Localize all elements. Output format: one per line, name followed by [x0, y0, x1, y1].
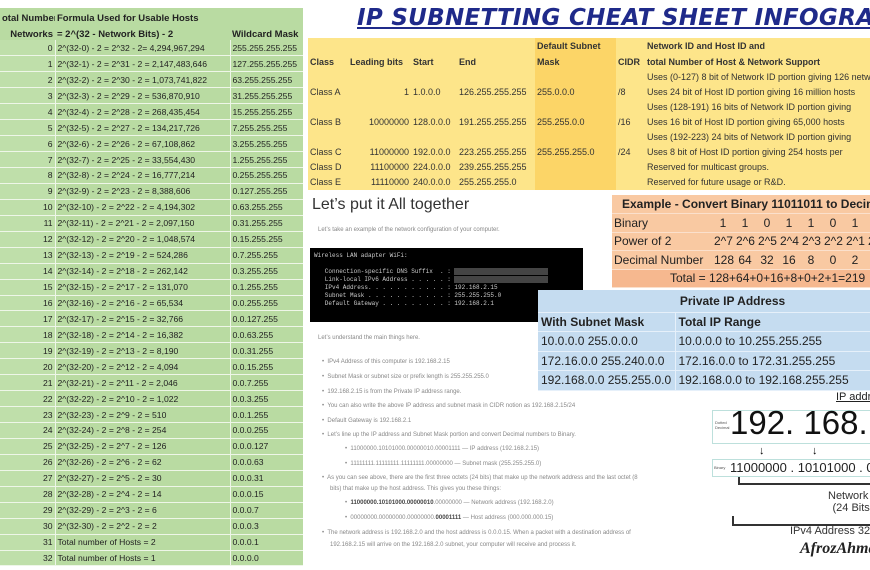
- panel: subnet formula table: 0.0.0.255: [232, 425, 268, 435]
- diagram: IP address structure: [712, 391, 870, 557]
- panel: subnet formula table: 7.255.255.255: [232, 123, 287, 133]
- terminal screenshot: Wireless LAN adapter WiFi: Connection-specific DNS Suffix . : Link-local IPv6 Address . . . . . : IPv4 Address. . . . . . . . . . . : 192.168.2.15 Subnet Mask . . . . . . . . . . . : 255.255.255.0 Default Gateway . . . . . . . . . : 192.168.2.1: [314, 252, 501, 307]
- panel: subnet formula table: 0.0.0.127: [232, 441, 268, 451]
- panel: subnet formula table: 10: [43, 202, 52, 212]
- text: explanation bullets: • 11000000.10101000.00000010.00000000 — Network address (192.168.2.0): [345, 500, 554, 506]
- panel: IP classes table: total Number of Host & Network Support: [647, 57, 820, 67]
- panel: IP classes table: [308, 38, 870, 190]
- panel: subnet formula table: 27: [43, 473, 52, 483]
- panel: subnet formula table: [0, 8, 303, 566]
- panel: subnet formula table: 2^(32-14) - 2 = 2^18 - 2 = 262,142: [58, 266, 188, 276]
- panel: binary conversion example: 128: [714, 253, 734, 267]
- panel: subnet formula table: 0.127.255.255: [232, 186, 287, 196]
- panel: IP classes table: Reserved for future usage or R&D.: [647, 177, 786, 187]
- panel: subnet formula table: 6: [48, 139, 52, 149]
- terminal screenshot: [310, 248, 583, 322]
- panel: IP classes table: Default Subnet: [537, 41, 601, 51]
- panel: subnet formula table: 0.1.255.255: [232, 282, 278, 292]
- text: explanation bullets: • Let’s line up the IP address and Subnet Mask portion and convert Decimal numbers to Binary.: [322, 432, 576, 438]
- panel: IP classes table: 1.0.0.0: [413, 87, 441, 97]
- panel: subnet formula table: 15.255.255.255: [232, 107, 292, 117]
- text: explanation bullets: • Subnet Mask or subnet size or prefix length is 255.255.255.0: [322, 374, 489, 380]
- panel: subnet formula table: 2^(32-6) - 2 = 2^26 - 2 = 67,108,862: [58, 139, 195, 149]
- panel: subnet formula table: 2^(32-16) - 2 = 2^16 - 2 = 65,534: [58, 298, 183, 308]
- heading: put it together: Let’s put it All together: [312, 196, 469, 213]
- panel: IP classes table: Mask: [537, 57, 560, 67]
- panel: subnet formula table: 2^(32-25) - 2 = 2^7 - 2 = 126: [58, 441, 166, 451]
- panel: binary conversion example: 2^7: [714, 234, 733, 248]
- panel: subnet formula table: Total number of Hosts = 1: [58, 553, 156, 563]
- panel: binary conversion example: 1: [808, 216, 814, 230]
- panel: IP classes table: Uses 8 bit of Host ID portion giving 254 hosts per: [647, 147, 843, 157]
- panel: subnet formula table: 2^(32-21) - 2 = 2^11 - 2 = 2,046: [58, 378, 178, 388]
- panel: IP classes table: 11100000: [370, 162, 409, 172]
- panel: subnet formula table: 25: [43, 441, 52, 451]
- panel: subnet formula table: 2^(32-28) - 2 = 2^4 - 2 = 14: [58, 489, 162, 499]
- panel: subnet formula table: 2^(32-18) - 2 = 2^14 - 2 = 16,382: [58, 330, 183, 340]
- panel: binary conversion example: 64: [738, 253, 752, 267]
- panel: binary conversion example: 0: [764, 216, 770, 230]
- panel: subnet formula table: 0.63.255.255: [232, 202, 283, 212]
- panel: subnet formula table: 2^(32-20) - 2 = 2^12 - 2 = 4,094: [58, 362, 178, 372]
- panel: private IP address table: With Subnet Mask: [541, 315, 644, 329]
- panel: subnet formula table: 0.7.255.255: [232, 250, 278, 260]
- panel: binary conversion example: 1: [786, 216, 792, 230]
- panel: subnet formula table: 2^(32-23) - 2 = 2^9 - 2 = 510: [58, 410, 166, 420]
- panel: subnet formula table: 21: [43, 378, 52, 388]
- panel: subnet formula table: 0: [48, 43, 52, 53]
- panel: subnet formula table: 29: [43, 505, 52, 515]
- text: explanation bullets: • 192.168.2.15 is from the Private IP address range.: [322, 389, 461, 395]
- text: explanation bullets: • IPv4 Address of this computer is 192.168.2.15: [322, 359, 450, 365]
- panel: private IP address table: Private IP Address: [680, 294, 785, 308]
- panel: subnet formula table: 1: [48, 59, 52, 69]
- panel: subnet formula table: 4: [48, 107, 52, 117]
- panel: subnet formula table: 26: [43, 457, 52, 467]
- panel: subnet formula table: 2^(32-26) - 2 = 2^6 - 2 = 62: [58, 457, 162, 467]
- panel: IP classes table: Network ID and Host ID and: [647, 41, 765, 51]
- text: explanation bullets: • As you can see above, there are the first three octets (24 bits) that make up the network address and the last octet (8: [322, 475, 638, 481]
- panel: subnet formula table: 30: [43, 521, 52, 531]
- panel: subnet formula table: 2^(32-8) - 2 = 2^24 - 2 = 16,777,214: [58, 170, 195, 180]
- panel: IP classes table: 192.0.0.0: [413, 147, 451, 157]
- panel: binary conversion example: Binary: [614, 216, 648, 230]
- panel: binary conversion example: 2^4: [780, 234, 799, 248]
- panel: IP classes table: 255.0.0.0: [537, 87, 575, 97]
- panel: subnet formula table: 2^(32-30) - 2 = 2^2 - 2 = 2: [58, 521, 157, 531]
- panel: subnet formula table: 2^(32-10) - 2 = 2^22 - 2 = 4,194,302: [58, 202, 195, 212]
- panel: binary conversion example: 8: [808, 253, 814, 267]
- diagram: IP address structure: 192. 168.: [730, 404, 868, 441]
- panel: binary conversion example: 1: [742, 216, 748, 230]
- panel: binary conversion example: [612, 195, 870, 288]
- panel: subnet formula table: 15: [43, 282, 52, 292]
- panel: subnet formula table: 0.255.255.255: [232, 170, 287, 180]
- panel: subnet formula table: 0.0.7.255: [232, 378, 268, 388]
- panel: IP classes table: 11000000: [370, 147, 409, 157]
- text: explanation bullets: bits) that make up the host address. This gives you these things:: [330, 486, 501, 492]
- panel: private IP address table: 172.16.0.0 255.240.0.0: [541, 354, 664, 368]
- panel: IP classes table: 255.255.255.0: [537, 147, 595, 157]
- panel: subnet formula table: 16: [43, 298, 52, 308]
- panel: IP classes table: 1: [404, 87, 409, 97]
- panel: binary conversion example: Power of 2: [614, 234, 671, 248]
- panel: subnet formula table: 255.255.255.255: [232, 43, 297, 53]
- panel: IP classes table: Leading bits: [350, 57, 403, 67]
- panel: subnet formula table: 2^(32-5) - 2 = 2^27 - 2 = 134,217,726: [58, 123, 200, 133]
- panel: subnet formula table: 2^(32-22) - 2 = 2^10 - 2 = 1,022: [58, 394, 178, 404]
- panel: IP classes table: 224.0.0.0: [413, 162, 451, 172]
- panel: IP classes table: Uses 16 bit of Host ID portion giving 65,000 hosts: [647, 117, 845, 127]
- panel: subnet formula table: 2^(32-2) - 2 = 2^30 - 2 = 1,073,741,822: [58, 75, 207, 85]
- panel: subnet formula table: 24: [43, 425, 52, 435]
- panel: subnet formula table: 14: [43, 266, 52, 276]
- panel: binary conversion example: 2^1: [846, 234, 865, 248]
- panel: subnet formula table: 2^(32-19) - 2 = 2^13 - 2 = 8,190: [58, 346, 178, 356]
- panel: subnet formula table: 32: [43, 553, 52, 563]
- panel: binary conversion example: 2^6: [736, 234, 755, 248]
- panel: subnet formula table: 18: [43, 330, 52, 340]
- panel: binary conversion example: Decimal Number: [614, 253, 703, 267]
- panel: subnet formula table: 22: [43, 394, 52, 404]
- panel: binary conversion example: 1: [720, 216, 726, 230]
- panel: binary conversion example: 2^2: [824, 234, 843, 248]
- diagram: IP address structure: Dotted: [715, 420, 727, 425]
- panel: subnet formula table: 2^(32-15) - 2 = 2^17 - 2 = 131,070: [58, 282, 188, 292]
- panel: subnet formula table: Wildcard Mask: [232, 29, 298, 40]
- panel: IP classes table: Start: [413, 57, 434, 67]
- text: explanation bullets: • The network address is 192.168.2.0 and the host address is 0.0.0.15. When a packet with a destination address of: [322, 530, 631, 536]
- panel: IP classes table: Class: [310, 57, 334, 67]
- panel: IP classes table: Class B: [310, 117, 341, 127]
- panel: subnet formula table: 2^(32-3) - 2 = 2^29 - 2 = 536,870,910: [58, 91, 200, 101]
- panel: subnet formula table: 2^(32-24) - 2 = 2^8 - 2 = 254: [58, 425, 166, 435]
- diagram: IP address structure: Binary: [714, 465, 725, 470]
- panel: subnet formula table: 5: [48, 123, 52, 133]
- panel: private IP address table: 10.0.0.0 255.0.0.0: [541, 334, 638, 348]
- panel: IP classes table: /8: [618, 87, 626, 97]
- panel: subnet formula table: 3: [48, 91, 52, 101]
- panel: subnet formula table: 0.0.0.1: [232, 537, 259, 547]
- panel: subnet formula table: 2^(32-29) - 2 = 2^3 - 2 = 6: [58, 505, 157, 515]
- panel: binary conversion example: Total = 128+64+0+16+8+0+2+1=219: [670, 271, 865, 285]
- panel: subnet formula table: 2^(32-7) - 2 = 2^25 - 2 = 33,554,430: [58, 155, 195, 165]
- panel: subnet formula table: 0.0.0.15: [232, 489, 264, 499]
- text: explanation bullets: • 11111111.11111111.11111111.00000000 — Subnet mask (255.255.255.0): [345, 461, 541, 467]
- panel: subnet formula table: 0.0.31.255: [232, 346, 273, 356]
- text: intro: Let’s take an example of the network configuration of your computer.: [318, 227, 500, 233]
- text: explanation bullets: • 11000000.10101000.00000010.00001111 — IP address (192.168.2.15): [345, 446, 539, 452]
- panel: subnet formula table: 23: [43, 410, 52, 420]
- panel: IP classes table: 240.0.0.0: [413, 177, 451, 187]
- panel: private IP address table: 10.0.0.0 to 10.255.255.255: [678, 334, 822, 348]
- panel: IP classes table: 11110000: [371, 177, 409, 187]
- panel: subnet formula table: 3.255.255.255: [232, 139, 287, 149]
- panel: subnet formula table: 31: [43, 537, 52, 547]
- panel: subnet formula table: 28: [43, 489, 52, 499]
- panel: subnet formula table: 13: [43, 250, 52, 260]
- panel: IP classes table: 191.255.255.255: [459, 117, 527, 127]
- text: explanation bullets: Let’s understand the main things here.: [318, 335, 420, 341]
- panel: IP classes table: 239.255.255.255: [459, 162, 527, 172]
- diagram: IP address structure: Decimal: [715, 425, 729, 430]
- panel: subnet formula table: 2^(32-12) - 2 = 2^20 - 2 = 1,048,574: [58, 234, 195, 244]
- panel: IP classes table: Class E: [310, 177, 341, 187]
- panel: subnet formula table: 12: [43, 234, 52, 244]
- panel: subnet formula table: 0.0.1.255: [232, 410, 268, 420]
- panel: private IP address table: 192.168.0.0 255.255.0.0: [541, 373, 671, 387]
- panel: subnet formula table: Formula Used for Usable Hosts: [57, 13, 198, 24]
- panel: subnet formula table: 0.0.63.255: [232, 330, 273, 340]
- panel: IP classes table: Reserved for multicast groups.: [647, 162, 769, 172]
- panel: binary conversion example: 2: [852, 253, 858, 267]
- panel: subnet formula table: 0.0.0.31: [232, 473, 264, 483]
- panel: IP classes table: 128.0.0.0: [413, 117, 451, 127]
- panel: private IP address table: [538, 290, 870, 391]
- panel: binary conversion example: 16: [782, 253, 796, 267]
- panel: binary conversion example: 32: [760, 253, 774, 267]
- panel: subnet formula table: 0.0.3.255: [232, 394, 268, 404]
- panel: subnet formula table: 2^(32-1) - 2 = 2^31 - 2 = 2,147,483,646: [58, 59, 207, 69]
- panel: subnet formula table: 127.255.255.255: [232, 59, 297, 69]
- panel: IP classes table: Uses (192-223) 24 bits of Network ID portion giving: [647, 132, 851, 142]
- panel: subnet formula table: 20: [43, 362, 52, 372]
- panel: IP classes table: Class D: [310, 162, 342, 172]
- panel: subnet formula table: 2: [48, 75, 52, 85]
- panel: subnet formula table: 9: [48, 186, 52, 196]
- panel: subnet formula table: 0.0.0.63: [232, 457, 264, 467]
- diagram: IP address structure: ↓: [759, 445, 764, 457]
- panel: subnet formula table: 0.0.255.255: [232, 298, 278, 308]
- panel: private IP address table: 192.168.0.0 to 192.168.255.255: [678, 373, 849, 387]
- panel: IP classes table: End: [459, 57, 476, 67]
- panel: subnet formula table: 0.0.127.255: [232, 314, 278, 324]
- panel: subnet formula table: 2^(32-9) - 2 = 2^23 - 2 = 8,388,606: [58, 186, 190, 196]
- panel: IP classes table: Uses (128-191) 16 bits of Network ID portion giving: [647, 102, 851, 112]
- panel: IP classes table: Class A: [310, 87, 341, 97]
- text: explanation bullets: 192.168.2.15 will arrive on the 192.168.2.0 subnet, your computer will receive and process it.: [330, 542, 576, 548]
- panel: binary conversion example: 0: [830, 253, 836, 267]
- panel: binary conversion example: 2^5: [758, 234, 777, 248]
- panel: subnet formula table: 0.0.0.3: [232, 521, 259, 531]
- panel: subnet formula table: 2^(32-11) - 2 = 2^21 - 2 = 2,097,150: [58, 218, 194, 228]
- panel: subnet formula table: 0.3.255.255: [232, 266, 278, 276]
- diagram: IP address structure: ↓: [812, 445, 818, 457]
- panel: subnet formula table: 0.31.255.255: [232, 218, 283, 228]
- panel: IP classes table: /24: [618, 147, 631, 157]
- panel: subnet formula table: 1.255.255.255: [232, 155, 287, 165]
- panel: subnet formula table: 31.255.255.255: [232, 91, 292, 101]
- panel: subnet formula table: 8: [48, 170, 52, 180]
- panel: subnet formula table: Total number of Hosts = 2: [58, 537, 156, 547]
- panel: IP classes table: 126.255.255.255: [459, 87, 527, 97]
- panel: subnet formula table: 17: [43, 314, 52, 324]
- panel: subnet formula table: 19: [43, 346, 52, 356]
- panel: subnet formula table: Networks: [10, 29, 53, 40]
- panel: binary conversion example: 0: [830, 216, 836, 230]
- panel: private IP address table: Total IP Range: [678, 315, 761, 329]
- text: explanation bullets: • Default Gateway is 192.168.2.1: [322, 418, 411, 424]
- panel: subnet formula table: 2^(32-27) - 2 = 2^5 - 2 = 30: [58, 473, 162, 483]
- panel: IP classes table: 255.255.0.0: [537, 117, 585, 127]
- panel: binary conversion example: 1: [852, 216, 858, 230]
- panel: IP classes table: 10000000: [369, 117, 409, 127]
- panel: IP classes table: Uses 24 bit of Host ID portion giving 16 million hosts: [647, 87, 855, 97]
- panel: subnet formula table: 2^(32-4) - 2 = 2^28 - 2 = 268,435,454: [58, 107, 200, 117]
- panel: subnet formula table: 0.0.15.255: [232, 362, 273, 372]
- panel: subnet formula table: 63.255.255.255: [232, 75, 292, 85]
- panel: subnet formula table: 2^(32-0) - 2 = 2^32 - 2= 4,294,967,294: [58, 43, 205, 53]
- panel: IP classes table: 255.255.255.0: [459, 177, 517, 187]
- panel: subnet formula table: 7: [48, 155, 52, 165]
- panel: subnet formula table: 11: [44, 218, 52, 228]
- panel: IP classes table: Class C: [310, 147, 342, 157]
- panel: subnet formula table: 0.0.0.0: [232, 553, 259, 563]
- panel: private IP address table: 172.16.0.0 to 172.31.255.255: [678, 354, 835, 368]
- panel: subnet formula table: 2^(32-13) - 2 = 2^19 - 2 = 524,286: [58, 250, 188, 260]
- panel: binary conversion example: 2^3: [802, 234, 821, 248]
- panel: subnet formula table: 0.15.255.255: [232, 234, 283, 244]
- panel: subnet formula table: 2^(32-17) - 2 = 2^15 - 2 = 32,766: [58, 314, 183, 324]
- text: explanation bullets: • 00000000.00000000.00000000.00001111 — Host address (000.000.000.15): [345, 515, 553, 521]
- panel: IP classes table: 223.255.255.255: [459, 147, 527, 157]
- panel: subnet formula table: 0.0.0.7: [232, 505, 259, 515]
- panel: IP classes table: /16: [618, 117, 631, 127]
- panel: IP classes table: CIDR: [618, 57, 640, 67]
- panel: subnet formula table: = 2^(32 - Network Bits) - 2: [57, 29, 173, 40]
- text: explanation bullets: • You can also write the above IP address and subnet mask in CIDR notion as 192.168.2.15/24: [322, 403, 575, 409]
